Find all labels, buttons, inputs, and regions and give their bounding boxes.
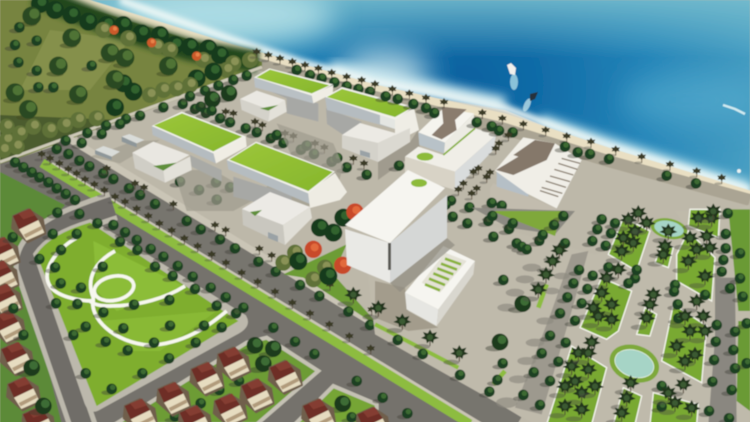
buildings G and H [405, 107, 582, 223]
coastal promenade [255, 63, 750, 200]
roof skylight [411, 179, 427, 187]
lower road zone [0, 146, 480, 422]
plaza surfaces [362, 204, 750, 422]
palms between buildings [389, 131, 513, 213]
park paths [47, 236, 227, 345]
building C [132, 112, 247, 183]
central park [28, 206, 249, 422]
boats [507, 63, 745, 173]
small service buildings [90, 134, 160, 163]
stepped roof louvers [432, 107, 467, 139]
forest trees [0, 0, 258, 158]
building H [490, 137, 582, 223]
left residential ground [0, 172, 65, 422]
garden beds [547, 209, 720, 422]
plaza and boulevard round trees [372, 208, 750, 422]
site tree rows [5, 70, 372, 211]
coast and inter-building trees [368, 80, 726, 213]
upper perimeter sidewalk [0, 67, 262, 162]
right plaza and gardens [362, 203, 750, 422]
forest ground [0, 0, 262, 165]
small green-roof pavilion [405, 246, 475, 326]
building B [325, 87, 420, 180]
sandy beach [62, 0, 750, 195]
coast palms [249, 48, 375, 98]
sea [88, 0, 750, 192]
building G [405, 107, 496, 190]
fountain rear [649, 215, 689, 242]
main white building [345, 170, 455, 292]
park trees [29, 209, 249, 395]
building D annex [242, 192, 312, 245]
upper road [55, 149, 515, 422]
garden palms [362, 203, 722, 422]
trees around building D [129, 203, 376, 356]
green median strip [42, 163, 470, 422]
building A [240, 68, 333, 122]
fountain front [605, 338, 664, 389]
upper-left paving, forest trees and first buildings [0, 0, 375, 211]
residential blocks and houses [0, 207, 391, 422]
shoreline foam [120, 0, 750, 190]
building D upper block [227, 142, 347, 211]
plaza shadow [253, 123, 343, 211]
median palms [34, 150, 129, 209]
